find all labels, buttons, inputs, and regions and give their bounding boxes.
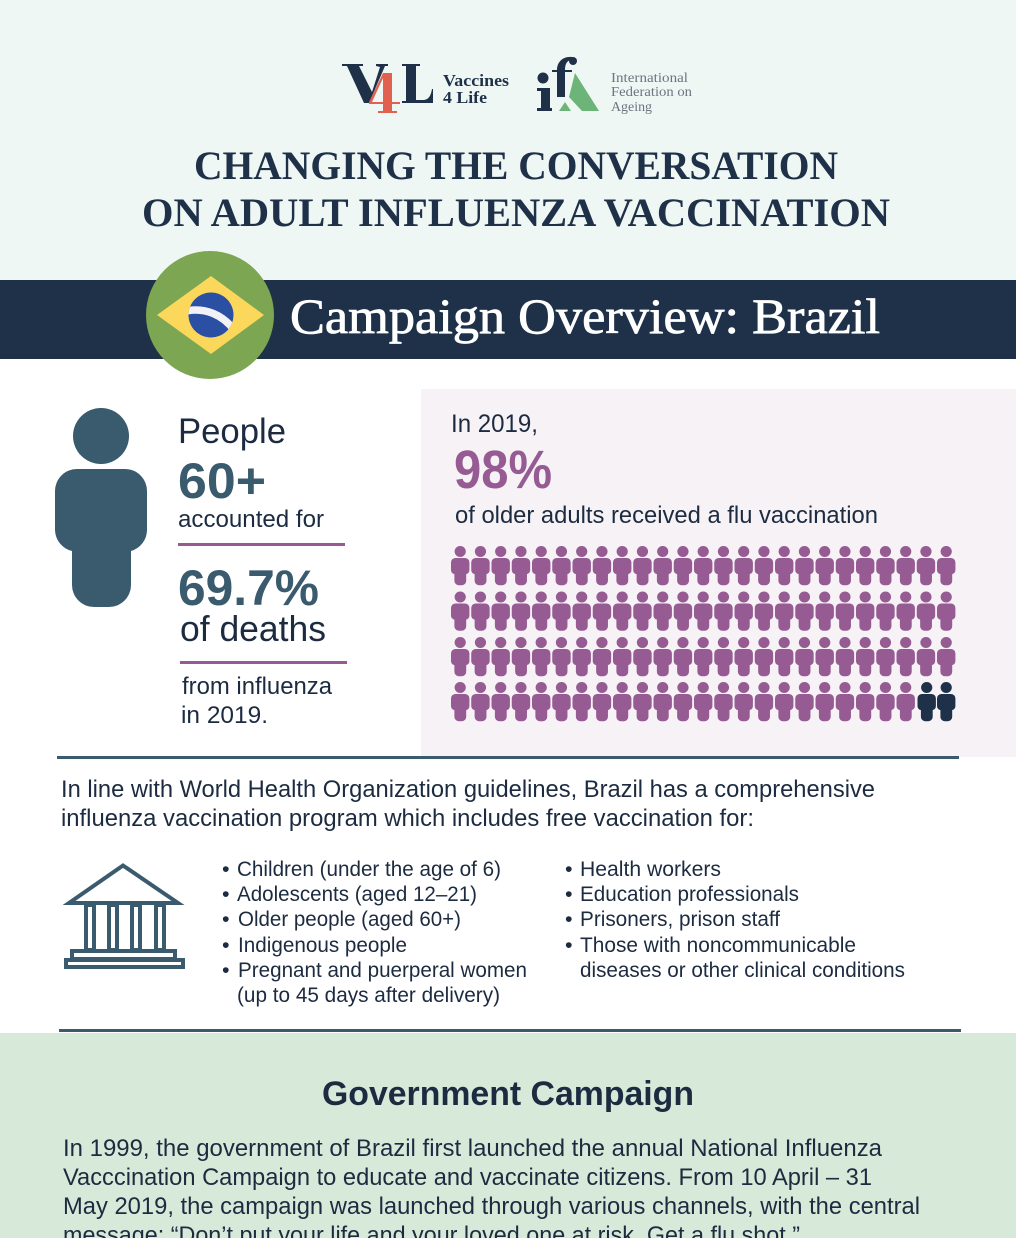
list: groups, right column: Education professionals [580, 882, 799, 906]
icon: Brazil flag [146, 251, 274, 379]
text: WHO guidelines: influenza vaccination program which includes free vaccination for: [61, 805, 754, 832]
title: ON ADULT INFLUENZA VACCINATION [142, 190, 890, 235]
panel: people 60+ statistic: in 2019. [181, 702, 268, 729]
text: In 2019: In 2019, [451, 410, 538, 438]
panel: 98% vaccination [421, 389, 1016, 757]
logo: International Federation on Ageing: International [611, 70, 688, 85]
list: groups, left column: • [222, 907, 230, 931]
list: groups, left column: • [222, 958, 230, 982]
text: WHO guidelines: In line with World Health Organization guidelines, Brazil has a comprehensive [61, 776, 875, 803]
list: groups, right column: diseases or other clinical conditions [580, 958, 905, 982]
panel: government campaign [0, 1033, 1016, 1238]
list: groups, left column: Older people (aged 60+) [238, 907, 461, 931]
list: groups, left column: Indigenous people [238, 933, 407, 957]
title: CHANGING THE CONVERSATION [194, 143, 838, 188]
logo: Vaccines 4 Life: 4 Life [443, 88, 487, 107]
list: groups, right column: • [565, 882, 573, 906]
list: groups, left column: Children (under the age of 6) [237, 857, 501, 881]
list: groups, left column: • [222, 933, 230, 957]
logo: International Federation on Ageing: Federation on [611, 84, 692, 99]
list: groups, left column: Adolescents (aged 12–21) [237, 882, 477, 906]
list: groups, right column: Health workers [580, 857, 721, 881]
list: groups, left column: • [222, 857, 230, 881]
number: 69.7%: 69.7% [178, 560, 319, 616]
text: of older adults: of older adults received a flu vaccination [455, 502, 878, 529]
list: groups, left column [222, 857, 527, 1007]
list: groups, right column: • [565, 857, 573, 881]
list: groups, right column [565, 857, 905, 982]
text: from influenza in 2019: from influenza [182, 673, 333, 700]
list: groups, right column: Those with noncommunicable [580, 933, 856, 957]
list: groups, left column: Pregnant and puerperal women [238, 958, 527, 982]
list: groups, right column: Prisoners, prison staff [580, 907, 780, 931]
logo: Vaccines 4 Life [342, 64, 509, 113]
text: accounted for: accounted for [178, 506, 324, 533]
list: groups, left column: (up to 45 days after delivery) [237, 983, 500, 1007]
text: campaign description [63, 1135, 920, 1238]
list: groups, right column: • [565, 907, 573, 931]
heading: Government Campaign: Government Campaign [322, 1075, 694, 1113]
panel: header background [0, 0, 1016, 281]
list: groups, left column: • [222, 882, 230, 906]
icon: person [55, 408, 147, 607]
title [142, 143, 890, 235]
banner: campaign overview [0, 280, 1016, 359]
text: WHO guidelines [61, 776, 875, 832]
logo: International Federation on Ageing: Ageing [611, 99, 652, 114]
text: People: People [178, 412, 286, 451]
logo: International Federation on Ageing [537, 57, 692, 114]
icon: government building [66, 866, 183, 967]
text: campaign description: Vacccination Campaign to educate and vaccinate citizens. From 10 April – 31 [63, 1164, 872, 1191]
pictogram chart: 98 of 100 [451, 546, 955, 721]
panel: people 60+ statistic [55, 408, 347, 729]
list: groups, right column: • [565, 933, 573, 957]
number: 98%: 98% [454, 440, 552, 500]
text: of deaths: of deaths [180, 608, 326, 649]
number: 60+: 60+ [178, 453, 266, 509]
text: campaign description: In 1999, the government of Brazil first launched the annual National Influenza [63, 1135, 883, 1162]
text: campaign description: May 2019, the campaign was launched through various channels, with the central [63, 1193, 920, 1220]
logo: Vaccines 4 Life: Vaccines [443, 71, 509, 90]
banner: campaign overview: Campaign Overview: Brazil [290, 288, 880, 344]
